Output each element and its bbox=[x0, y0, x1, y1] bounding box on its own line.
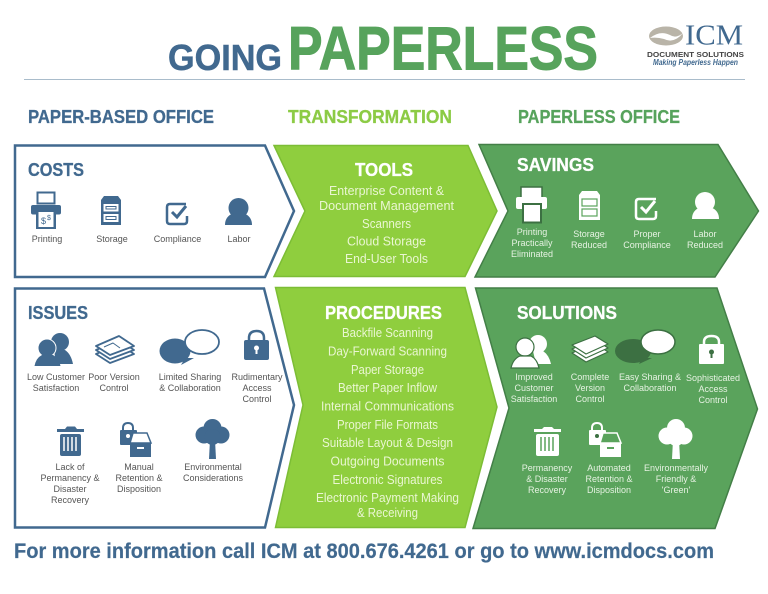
panel: costs bbox=[15, 146, 294, 277]
list: tools: Enterprise Content & bbox=[329, 184, 445, 198]
label: labor reduced: Reduced bbox=[687, 240, 723, 250]
icon: customers bbox=[511, 335, 551, 368]
label: printing practically eliminated: Printing bbox=[517, 227, 547, 237]
label: lack of permanency: Permanency & bbox=[40, 473, 100, 483]
label: environmentally friendly: Environmentally bbox=[644, 463, 709, 473]
column heading: paperless office: PAPERLESS OFFICE bbox=[518, 107, 680, 127]
icon: document stack bbox=[96, 336, 134, 363]
label: improved customer satisfaction: Customer bbox=[514, 383, 554, 393]
icon: printer bbox=[31, 192, 61, 229]
label: automated retention: Automated bbox=[587, 463, 631, 473]
label: easy sharing: Easy Sharing & bbox=[619, 372, 681, 382]
label: rudimentary access control: Access bbox=[242, 383, 272, 393]
label: proper compliance: Proper bbox=[633, 229, 661, 239]
label: manual retention: Retention & bbox=[115, 473, 163, 483]
heading: procedures: PROCEDURES bbox=[325, 303, 442, 323]
label: permanency: Permanency bbox=[522, 463, 573, 473]
icon: padlock bbox=[699, 336, 724, 364]
panel: tools bbox=[274, 146, 497, 276]
label: lack of permanency: Lack of bbox=[55, 462, 85, 472]
title: GOING bbox=[168, 37, 282, 78]
label: lack of permanency: Recovery bbox=[51, 495, 90, 505]
label: environmentally friendly: 'Green' bbox=[662, 485, 691, 495]
heading: tools: TOOLS bbox=[355, 160, 413, 180]
heading: savings: SAVINGS bbox=[517, 155, 594, 175]
icon: storage cabinet bbox=[579, 191, 600, 220]
heading: solutions: SOLUTIONS bbox=[517, 303, 617, 323]
list: procedures bbox=[316, 326, 459, 520]
list: tools: Cloud Storage bbox=[347, 234, 426, 248]
icon: printer: $ bbox=[41, 216, 46, 226]
label: lack of permanency: Disaster bbox=[53, 484, 87, 494]
label: manual retention: Disposition bbox=[117, 484, 161, 494]
label: storage reduced: Storage bbox=[573, 229, 605, 239]
icon: tree bbox=[658, 419, 692, 459]
list: procedures: Suitable Layout & Design bbox=[322, 436, 453, 450]
logo: ICM Document Solutions: ICM bbox=[685, 20, 743, 52]
label: poor version control: Control bbox=[99, 383, 129, 393]
list: procedures: Backfile Scanning bbox=[342, 326, 433, 340]
icon: speech bubbles bbox=[615, 330, 675, 364]
label: permanency: Recovery bbox=[528, 485, 567, 495]
list: procedures: Paper Storage bbox=[351, 363, 424, 377]
panel: issues bbox=[15, 288, 294, 528]
icon: printer bbox=[516, 187, 547, 222]
list: procedures: Proper File Formats bbox=[337, 418, 438, 432]
list: procedures: Internal Communications bbox=[321, 400, 454, 414]
logo: ICM Document Solutions: DOCUMENT SOLUTIONS bbox=[647, 50, 744, 59]
label: sophisticated access control: Control bbox=[698, 395, 728, 405]
label: low customer satisfaction: Low Customer bbox=[27, 372, 85, 382]
title: PAPERLESS bbox=[288, 14, 598, 82]
label: environmental considerations: Environmental bbox=[184, 462, 242, 472]
panel: solutions bbox=[473, 288, 758, 528]
label: environmental considerations: Considerations bbox=[183, 473, 244, 483]
title bbox=[168, 14, 598, 82]
list: procedures: Electronic Payment Making bbox=[316, 491, 459, 505]
panel: savings bbox=[475, 144, 758, 277]
label: environmentally friendly: Friendly & bbox=[656, 474, 696, 484]
list: procedures: Better Paper Inflow bbox=[338, 381, 438, 395]
list: procedures: Outgoing Documents bbox=[330, 454, 444, 468]
label: automated retention: Retention & bbox=[585, 474, 633, 484]
label: limited sharing: & Collaboration bbox=[159, 383, 221, 393]
icon: tree bbox=[196, 419, 230, 459]
label: easy sharing: Collaboration bbox=[623, 383, 677, 393]
icon: lock and box bbox=[589, 423, 621, 457]
label: printing practically eliminated: Practically bbox=[511, 238, 553, 248]
icon: compliance checkbox bbox=[636, 199, 656, 219]
column heading: paper-based office: PAPER-BASED OFFICE bbox=[28, 107, 214, 127]
label: labor reduced: Labor bbox=[693, 229, 717, 239]
label: complete version control: Control bbox=[575, 394, 605, 404]
label: complete version control: Version bbox=[575, 383, 605, 393]
icon: compliance checkbox bbox=[167, 204, 187, 224]
label: permanency: & Disaster bbox=[526, 474, 568, 484]
list: tools: Document Management bbox=[319, 199, 455, 213]
list: procedures: Electronic Signatures bbox=[332, 473, 442, 487]
icon: trash bin bbox=[534, 427, 561, 456]
icon: printer: $ bbox=[47, 215, 51, 222]
label: improved customer satisfaction: Improved bbox=[515, 372, 553, 382]
icon: labor person bbox=[225, 198, 252, 225]
logo: ICM Document Solutions bbox=[647, 20, 744, 67]
footer call to action: For more information call ICM at 800.676.4261 or go to www.icmdocs.com bbox=[14, 540, 714, 563]
logo: ICM Document Solutions: Making Paperless Happen bbox=[653, 58, 738, 67]
icon: lock and box bbox=[120, 423, 151, 457]
label: rudimentary access control: Rudimentary bbox=[231, 372, 283, 382]
label: compliance: Compliance bbox=[154, 234, 201, 244]
icon: speech bubbles bbox=[160, 330, 219, 365]
label: automated retention: Disposition bbox=[587, 485, 631, 495]
list: tools: Scanners bbox=[362, 217, 411, 231]
icon: document stack bbox=[572, 336, 608, 362]
list: tools: End-User Tools bbox=[345, 252, 428, 266]
icon: padlock bbox=[244, 331, 269, 360]
label: rudimentary access control: Control bbox=[242, 394, 272, 404]
list: tools bbox=[319, 184, 455, 266]
label: printing practically eliminated: Eliminated bbox=[511, 249, 553, 259]
label: low customer satisfaction: Satisfaction bbox=[33, 383, 79, 393]
label: poor version control: Poor Version bbox=[88, 372, 140, 382]
label: sophisticated access control: Access bbox=[698, 384, 728, 394]
label: printing: Printing bbox=[32, 234, 62, 244]
list: procedures: Day-Forward Scanning bbox=[328, 344, 447, 358]
label: sophisticated access control: Sophisticated bbox=[686, 373, 740, 383]
label: complete version control: Complete bbox=[571, 372, 609, 382]
heading: costs: COSTS bbox=[28, 160, 84, 180]
column heading: transformation: TRANSFORMATION bbox=[288, 107, 452, 127]
label: improved customer satisfaction: Satisfaction bbox=[511, 394, 557, 404]
icon: labor person bbox=[692, 192, 719, 219]
icon: trash bin bbox=[57, 426, 84, 456]
label: labor: Labor bbox=[227, 234, 251, 244]
label: manual retention: Manual bbox=[124, 462, 154, 472]
heading: issues: ISSUES bbox=[28, 303, 88, 323]
label: storage: Storage bbox=[96, 234, 128, 244]
label: storage reduced: Reduced bbox=[571, 240, 607, 250]
list: procedures: & Receiving bbox=[357, 506, 418, 520]
icon: storage cabinet bbox=[101, 196, 121, 225]
panel: procedures bbox=[276, 288, 497, 528]
label: limited sharing: Limited Sharing bbox=[159, 372, 221, 382]
icon: customers bbox=[34, 333, 73, 366]
label: proper compliance: Compliance bbox=[623, 240, 671, 250]
